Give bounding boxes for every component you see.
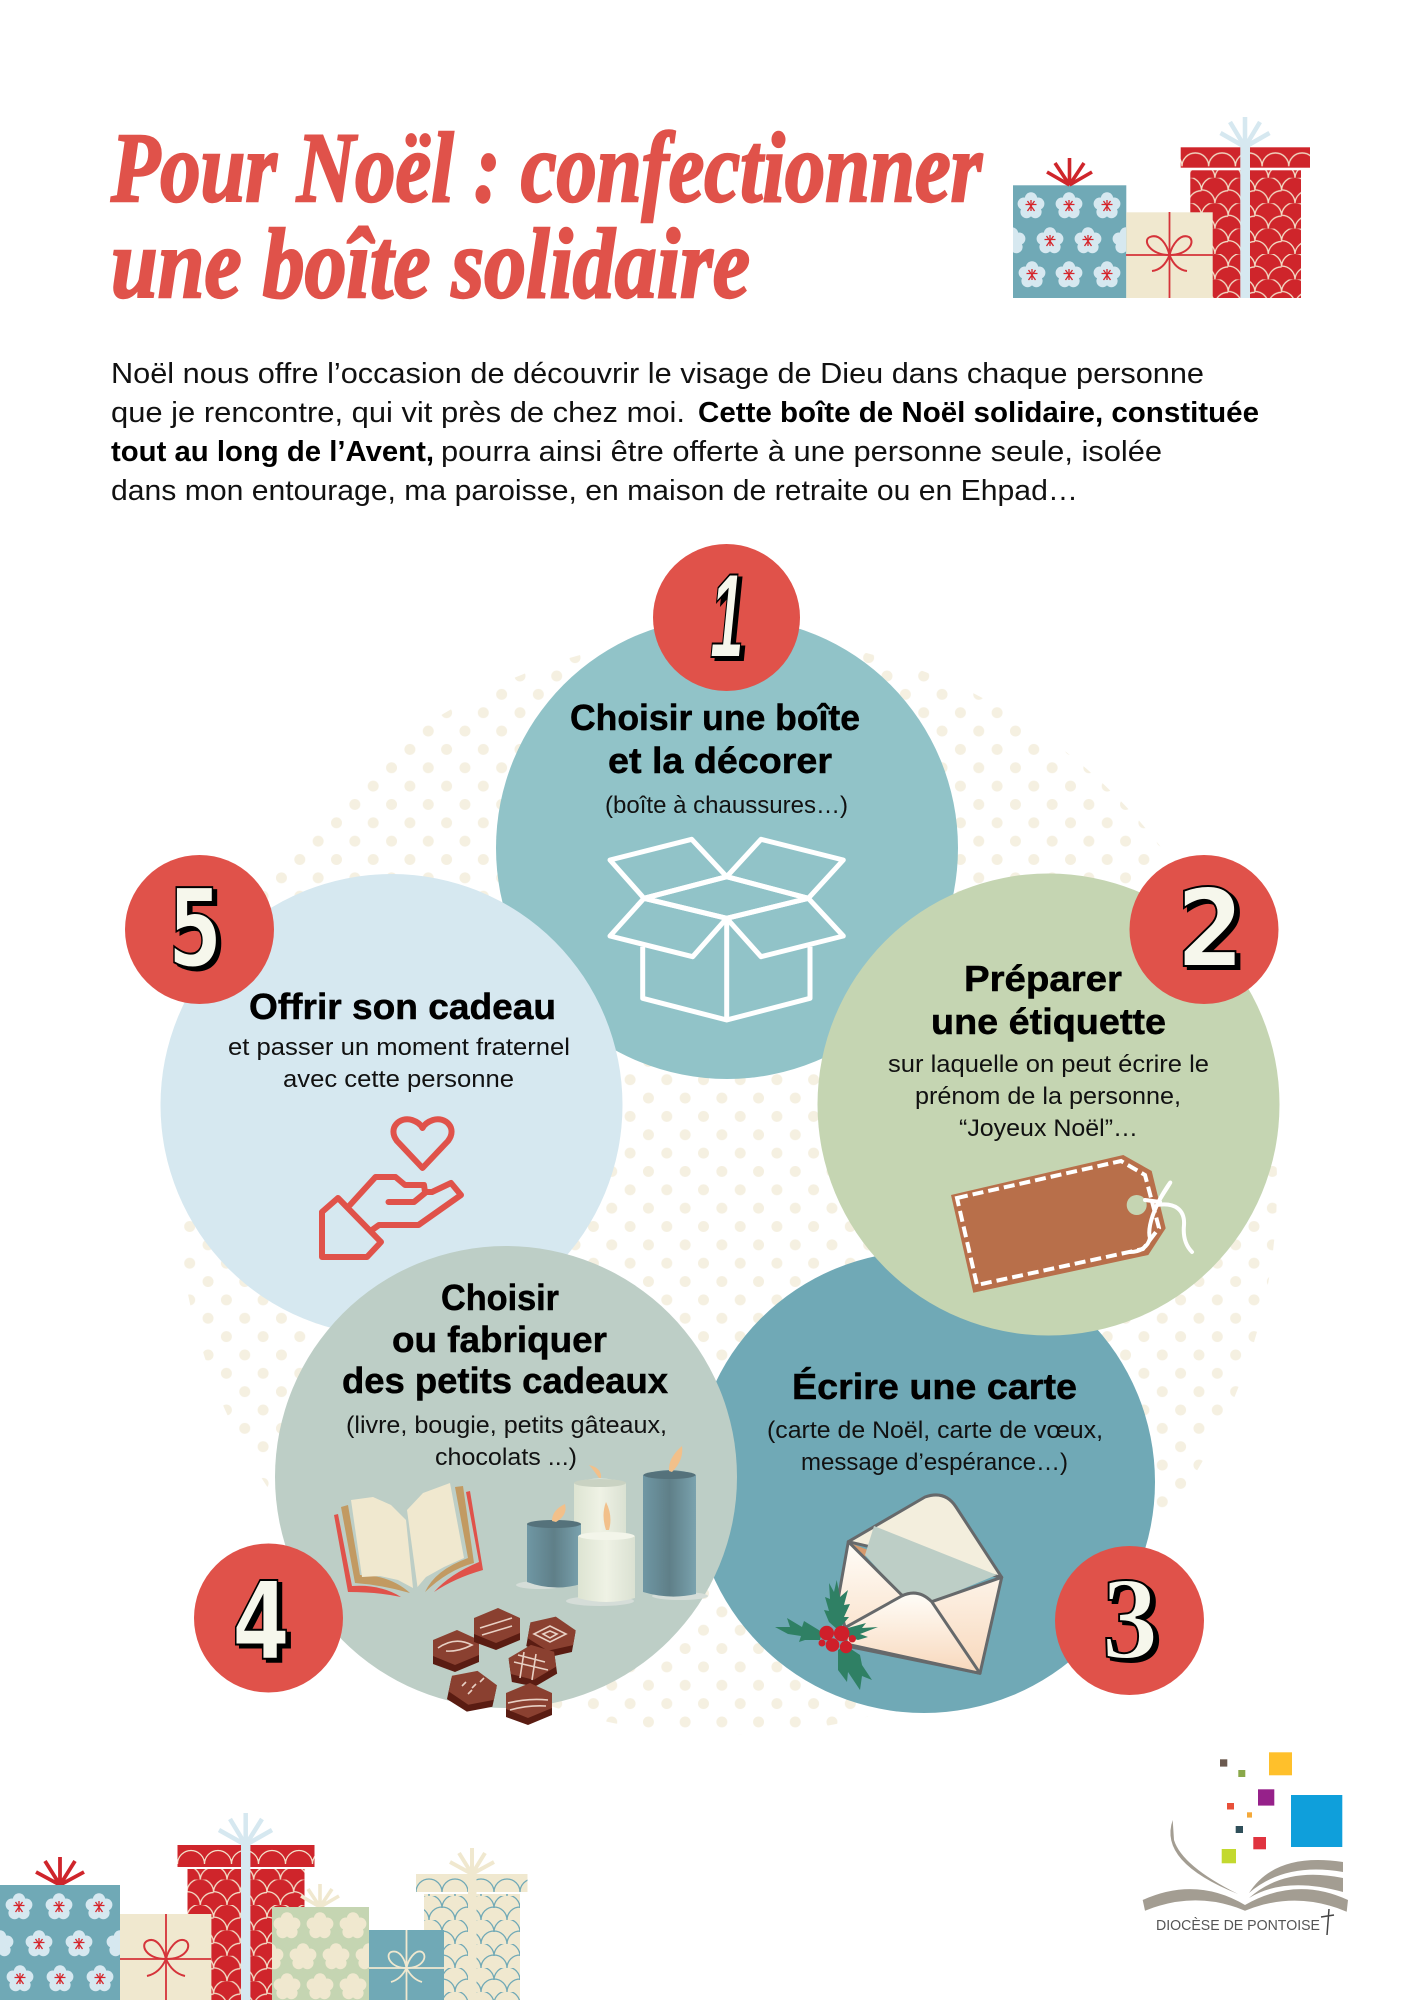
tall cream gift: [416, 1848, 528, 2000]
title: [110, 112, 983, 319]
icon: hand and heart: [322, 1119, 461, 1257]
heading 1: [570, 697, 860, 781]
logo: diocese: [1143, 1752, 1348, 1935]
badge: number 2: 2: [1176, 867, 1244, 992]
intro text: Noël nous offre l’occasion de découvrir le visage de Dieu dans chaque personne: [111, 358, 1204, 390]
icon: gifts bottom left: [0, 1813, 528, 2000]
badge: number 1: 1: [710, 549, 744, 683]
subtext 1: (boîte à chaussures…): [605, 792, 848, 819]
logo text: DIOCÈSE DE PONTOISE: [1156, 1917, 1320, 1934]
intro text: Cette boîte de Noël solidaire, constituée: [698, 397, 1259, 429]
icon: book: [334, 1483, 483, 1597]
logo book: [1143, 1820, 1348, 1912]
subtext 5: [228, 1034, 570, 1093]
logo cross: [1321, 1909, 1334, 1935]
dotted background: [170, 630, 1280, 1740]
heading 2: [931, 958, 1166, 1042]
subtext 4: (livre, bougie, petits gâteaux,: [346, 1412, 667, 1439]
heading 2: Préparer: [964, 958, 1122, 999]
subtext 2: “Joyeux Noël”…: [959, 1115, 1138, 1142]
title: une boîte solidaire: [111, 208, 750, 319]
icon: candles: [516, 1446, 708, 1606]
intro text: tout au long de l’Avent,: [111, 436, 434, 468]
badge: number 4: [194, 1544, 343, 1692]
badge: number 4: 4: [232, 1560, 290, 1685]
icon: open box: [610, 839, 843, 1020]
blue gift: [1013, 158, 1126, 298]
heading 3: Écrire une carte: [792, 1366, 1077, 1407]
icon: gifts top right: [999, 117, 1310, 298]
cream ribbon gift: [120, 1914, 211, 2000]
green flower gift: [272, 1884, 369, 2000]
subtext 2: [888, 1051, 1209, 1142]
subtext 3: [767, 1417, 1103, 1476]
icon: envelope with holly: [775, 1495, 1002, 1690]
heading 4: ou fabriquer: [392, 1319, 607, 1360]
icon: gift tag: [951, 1155, 1192, 1293]
title: Pour Noël : confectionner: [110, 112, 983, 223]
panel: step 2: [818, 874, 1280, 1336]
heading 5: Offrir son cadeau: [249, 986, 556, 1027]
badge: number 3: 3: [1102, 1553, 1158, 1684]
heading 2: une étiquette: [931, 1001, 1166, 1042]
heading 4: [342, 1277, 668, 1401]
panel: step 1: [496, 617, 958, 1079]
subtext 4: chocolats ...): [435, 1444, 577, 1471]
heading 1: et la décorer: [608, 740, 832, 781]
panel: step 5: [160, 874, 622, 1336]
subtext 3: (carte de Noël, carte de vœux,: [767, 1417, 1103, 1444]
teal gift: [369, 1930, 444, 2000]
badge: number 5: [125, 855, 274, 1004]
large red gift: [178, 1813, 314, 2000]
badge: number 5: 5: [168, 867, 222, 992]
badge: number 1: [653, 544, 800, 691]
red gift: [1181, 117, 1310, 298]
subtext 5: et passer un moment fraternel: [228, 1034, 570, 1061]
intro text: [111, 358, 1259, 507]
intro text: dans mon entourage, ma paroisse, en maison de retraite ou en Ehpad…: [111, 475, 1078, 507]
heading 1: Choisir une boîte: [570, 697, 860, 738]
intro text: que je rencontre, qui vit près de chez moi.: [111, 397, 685, 429]
panel: step 4: [275, 1246, 737, 1725]
icon: chocolates: [433, 1608, 577, 1725]
subtext 5: avec cette personne: [283, 1066, 514, 1093]
badge: number 2: [1130, 855, 1278, 1004]
subtext 4: [346, 1412, 667, 1471]
cream gift: [1126, 212, 1213, 298]
subtext 3: message d’espérance…): [801, 1449, 1068, 1476]
intro text: pourra ainsi être offerte à une personne seule, isolée: [441, 436, 1162, 468]
subtext 2: sur laquelle on peut écrire le: [888, 1051, 1209, 1078]
logo squares: [1220, 1752, 1342, 1863]
badge: number 3: [1055, 1546, 1204, 1695]
heading 4: Choisir: [441, 1277, 559, 1318]
heading 4: des petits cadeaux: [342, 1360, 668, 1401]
blue flower gift: [0, 1857, 120, 2000]
subtext 2: prénom de la personne,: [915, 1083, 1181, 1110]
panel: step 3: [693, 1251, 1155, 1713]
